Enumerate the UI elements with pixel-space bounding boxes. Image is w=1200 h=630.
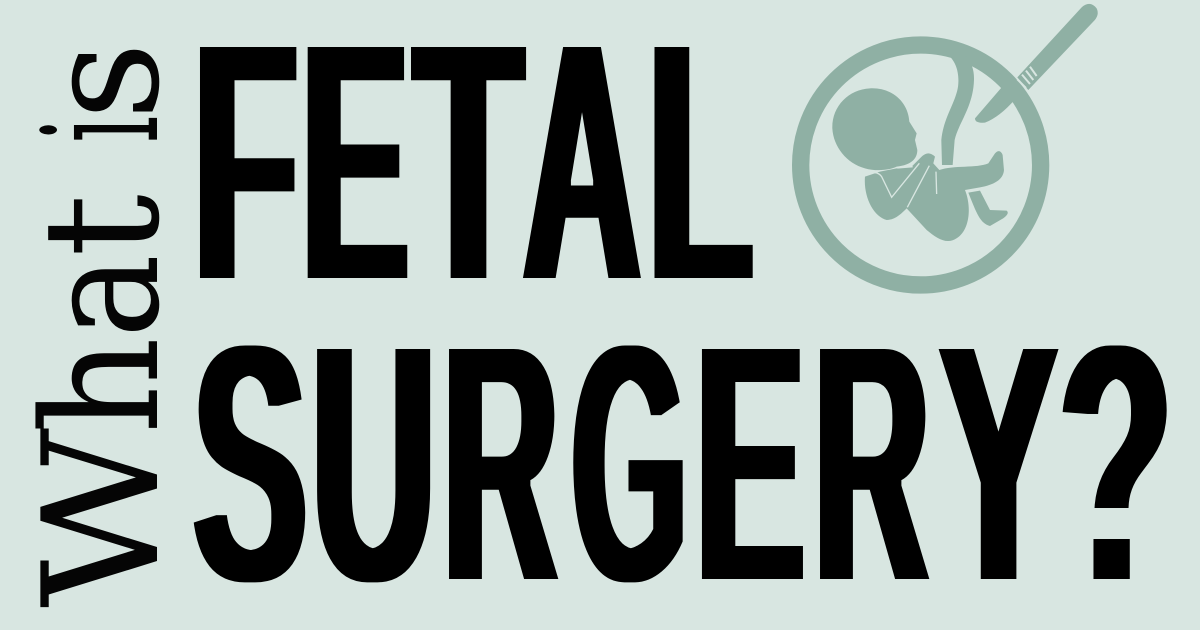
heading: SURGERY? [193,274,1172,630]
heading: What is: a [8,254,195,338]
fetus head [832,88,917,170]
icon: fetus in circle with scalpel [801,4,1098,285]
heading: What is: s [8,42,195,120]
heading: What is: i [8,116,195,169]
fetus body contour lines [865,163,937,207]
fetus lower leg [968,191,1008,226]
fetus body and limbs [865,151,1004,241]
icon ring [801,45,1041,285]
umbilical cord [940,50,974,165]
heading: What is: t [8,194,195,257]
scalpel grip marks [1017,67,1037,88]
scalpel [975,4,1098,123]
scalpel handle [1017,4,1098,90]
scalpel blade [975,87,1015,123]
heading: FETAL [194,0,753,354]
heading: What is: W [8,428,195,608]
heading: What is: h [8,337,195,434]
